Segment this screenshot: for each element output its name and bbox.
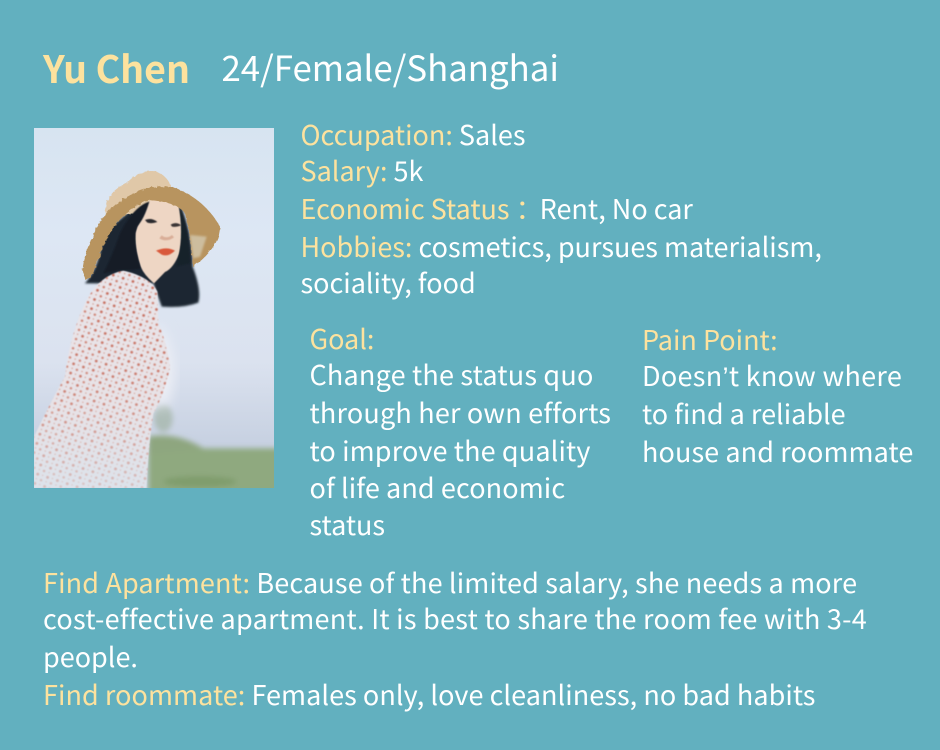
profile facts — [300, 114, 822, 301]
photo: young woman in straw hat and dotted dress — [34, 128, 274, 488]
profile facts: Occupation: Sales — [300, 114, 525, 153]
profile facts: sociality, food — [300, 262, 476, 301]
goal text block: to improve the quality — [310, 430, 591, 469]
pain point text block: Pain Point: — [642, 319, 778, 358]
hair front — [103, 202, 149, 273]
title: persona name and demographics: Yu Chen — [43, 39, 190, 94]
pain point text block: house and roommate — [642, 431, 913, 470]
find apartment and roommate needs: people. — [43, 636, 138, 675]
goal text block: status — [310, 504, 385, 543]
pain point text block: to find a reliable — [642, 393, 846, 432]
face and neck — [135, 199, 182, 283]
goal text block — [310, 318, 611, 543]
goal text block: Goal: — [310, 318, 374, 357]
body halo — [153, 327, 174, 407]
goal text block: Change the status quo — [310, 354, 594, 393]
title: persona name and demographics: 24/Female/Shanghai — [222, 42, 559, 92]
hair — [85, 200, 199, 307]
pain point text block: Doesn’t know where — [642, 355, 902, 394]
find apartment and roommate needs: Find roommate: Females only, love cleanliness, no bad habits — [43, 674, 815, 713]
profile facts: Economic Status ：Rent, No car — [300, 188, 693, 227]
hat brim — [83, 187, 220, 280]
sky — [34, 128, 274, 488]
profile facts: Salary: 5k — [300, 150, 423, 189]
eyes, nose and lips — [145, 219, 181, 255]
goal text block: through her own efforts — [310, 392, 611, 431]
hat crown — [104, 170, 172, 215]
pain point text block — [642, 319, 913, 470]
find apartment and roommate needs — [43, 562, 867, 713]
grass and tree — [146, 404, 274, 488]
title: persona name and demographics — [42, 39, 559, 94]
dress — [34, 271, 170, 488]
find apartment and roommate needs: cost-effective apartment. It is best to share the room fee with 3-4 — [43, 598, 867, 637]
find apartment and roommate needs: Find Apartment: Because of the limited salary, she needs a more — [43, 562, 857, 601]
goal text block: of life and economic — [310, 467, 565, 506]
profile facts: Hobbies: cosmetics, pursues materialism, — [300, 226, 822, 265]
